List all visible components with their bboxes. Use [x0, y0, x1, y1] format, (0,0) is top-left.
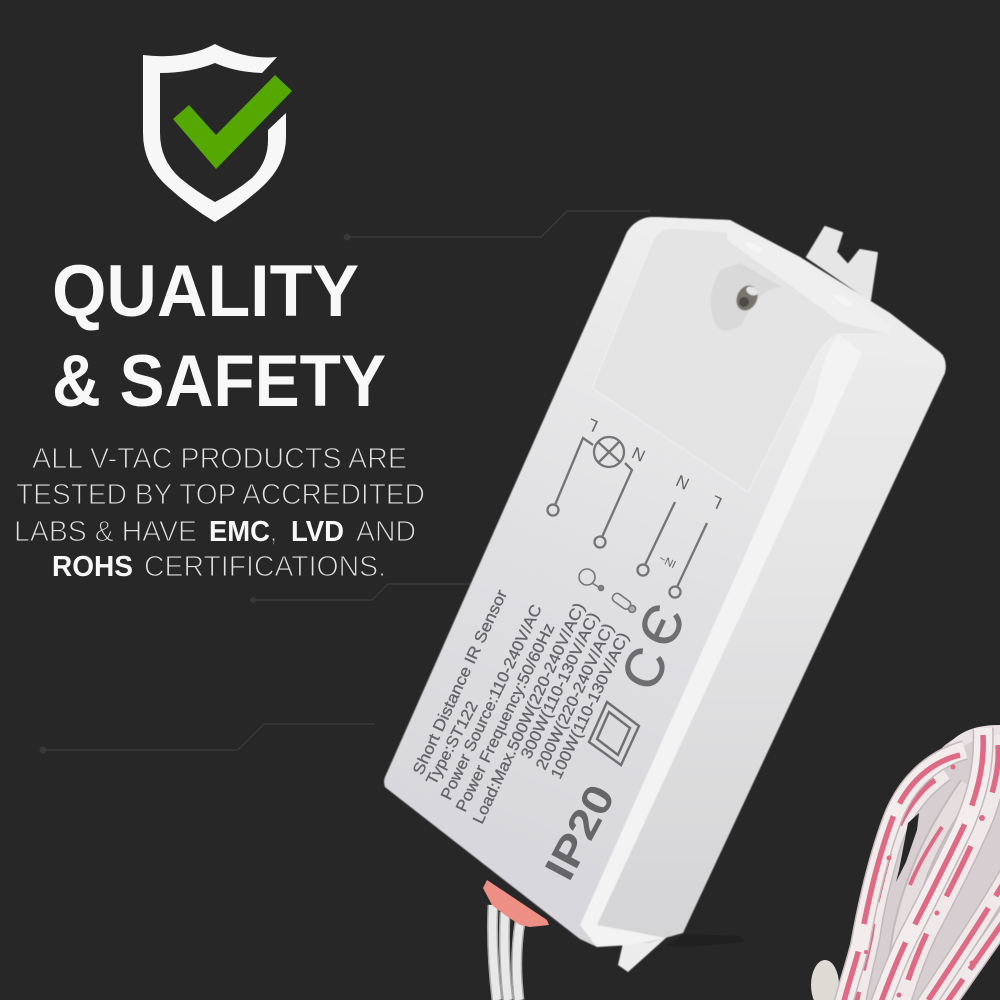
terminal cover plate: [592, 228, 888, 492]
product label text: Type:ST122: [424, 699, 482, 788]
product label text: 200W(220-240V/AC): [533, 621, 618, 773]
product label text: Short Distance IR Sensor: [410, 587, 511, 778]
terminal letters: N: [673, 471, 692, 493]
wiring diagram: [548, 414, 725, 598]
sensor housing: [384, 217, 946, 972]
shadow under sensor: [665, 934, 745, 946]
cable strand: right: [925, 872, 1000, 1000]
terminal holes: [745, 240, 855, 309]
callout line: upper: [344, 211, 650, 240]
heading: quality and safety: QUALITY: [52, 251, 359, 332]
cable clip: [811, 960, 839, 1000]
cable strand: front: [880, 728, 983, 1000]
housing side face: [384, 217, 946, 947]
lead wires: [492, 905, 520, 1000]
terminal letters: L: [708, 491, 725, 513]
screw: [732, 282, 762, 314]
product label text: Power Source:110-240V/AC: [438, 602, 546, 803]
product label text: 100W(110-130V/AC): [548, 630, 633, 782]
cable strand: rear: [890, 785, 968, 1000]
coiled red and white cable: [843, 726, 1000, 1000]
mounting tab: top: [807, 227, 877, 300]
screw recess: [711, 263, 782, 331]
product label text: Load:Max.500W(220-240V/AC): [470, 600, 589, 827]
housing top bevel: [837, 330, 945, 370]
CE mark: [609, 596, 697, 699]
heading: quality and safety: [52, 251, 386, 422]
top ridge highlight: [727, 226, 890, 334]
terminal letters: [584, 414, 725, 570]
heading: quality and safety: & SAFETY: [52, 341, 386, 422]
text block: certification statement: [14, 443, 425, 583]
gap between cable strands: [896, 813, 919, 882]
text block: certification statement: TESTED BY TOP ACCREDITED: [16, 479, 425, 511]
product label text: Power Frequency:50/60Hz: [453, 621, 558, 815]
lamp symbol: [594, 437, 624, 467]
icon: quality shield with green check: [143, 44, 292, 222]
text block: certification statement: ,: [270, 516, 277, 548]
cable strand: left outer: [843, 750, 965, 1000]
cable strand: far right: [945, 912, 1000, 1000]
text block: certification statement: LVD: [291, 516, 344, 548]
text block: certification statement: EMC: [209, 516, 270, 548]
text block: certification statement: ROHS: [52, 551, 133, 583]
terminal letters: L: [584, 414, 601, 436]
text block: certification statement: ALL V-TAC PRODUCTS ARE: [32, 443, 407, 475]
cable printed markings: [864, 764, 985, 998]
CE mark: Є: [626, 596, 697, 656]
product label text: [410, 587, 633, 827]
housing bright edge band: [580, 334, 862, 947]
callout line: middle: [250, 584, 472, 603]
cable strand: centre right: [900, 735, 998, 1000]
icon: incandescent bulb: [579, 569, 604, 590]
cable strand: left inner: [856, 772, 945, 1000]
text block: certification statement: CERTIFICATIONS.: [144, 551, 386, 583]
callout line: lower: [40, 724, 375, 754]
icon: tube lamp: [611, 592, 638, 615]
product label text: 300W(110-130V/AC): [518, 610, 603, 762]
text block: certification statement: LABS & HAVE: [14, 516, 197, 548]
terminal letters: IN~: [657, 552, 678, 570]
class II double square: [589, 702, 639, 765]
IP20 rating: IP20: [535, 777, 624, 887]
housing front face: [384, 217, 888, 939]
terminal letters: N: [629, 443, 648, 465]
text block: certification statement: AND: [356, 516, 416, 548]
CE mark: C: [609, 638, 680, 699]
mounting tab: bottom: [612, 925, 667, 972]
pink connector: [483, 880, 549, 927]
